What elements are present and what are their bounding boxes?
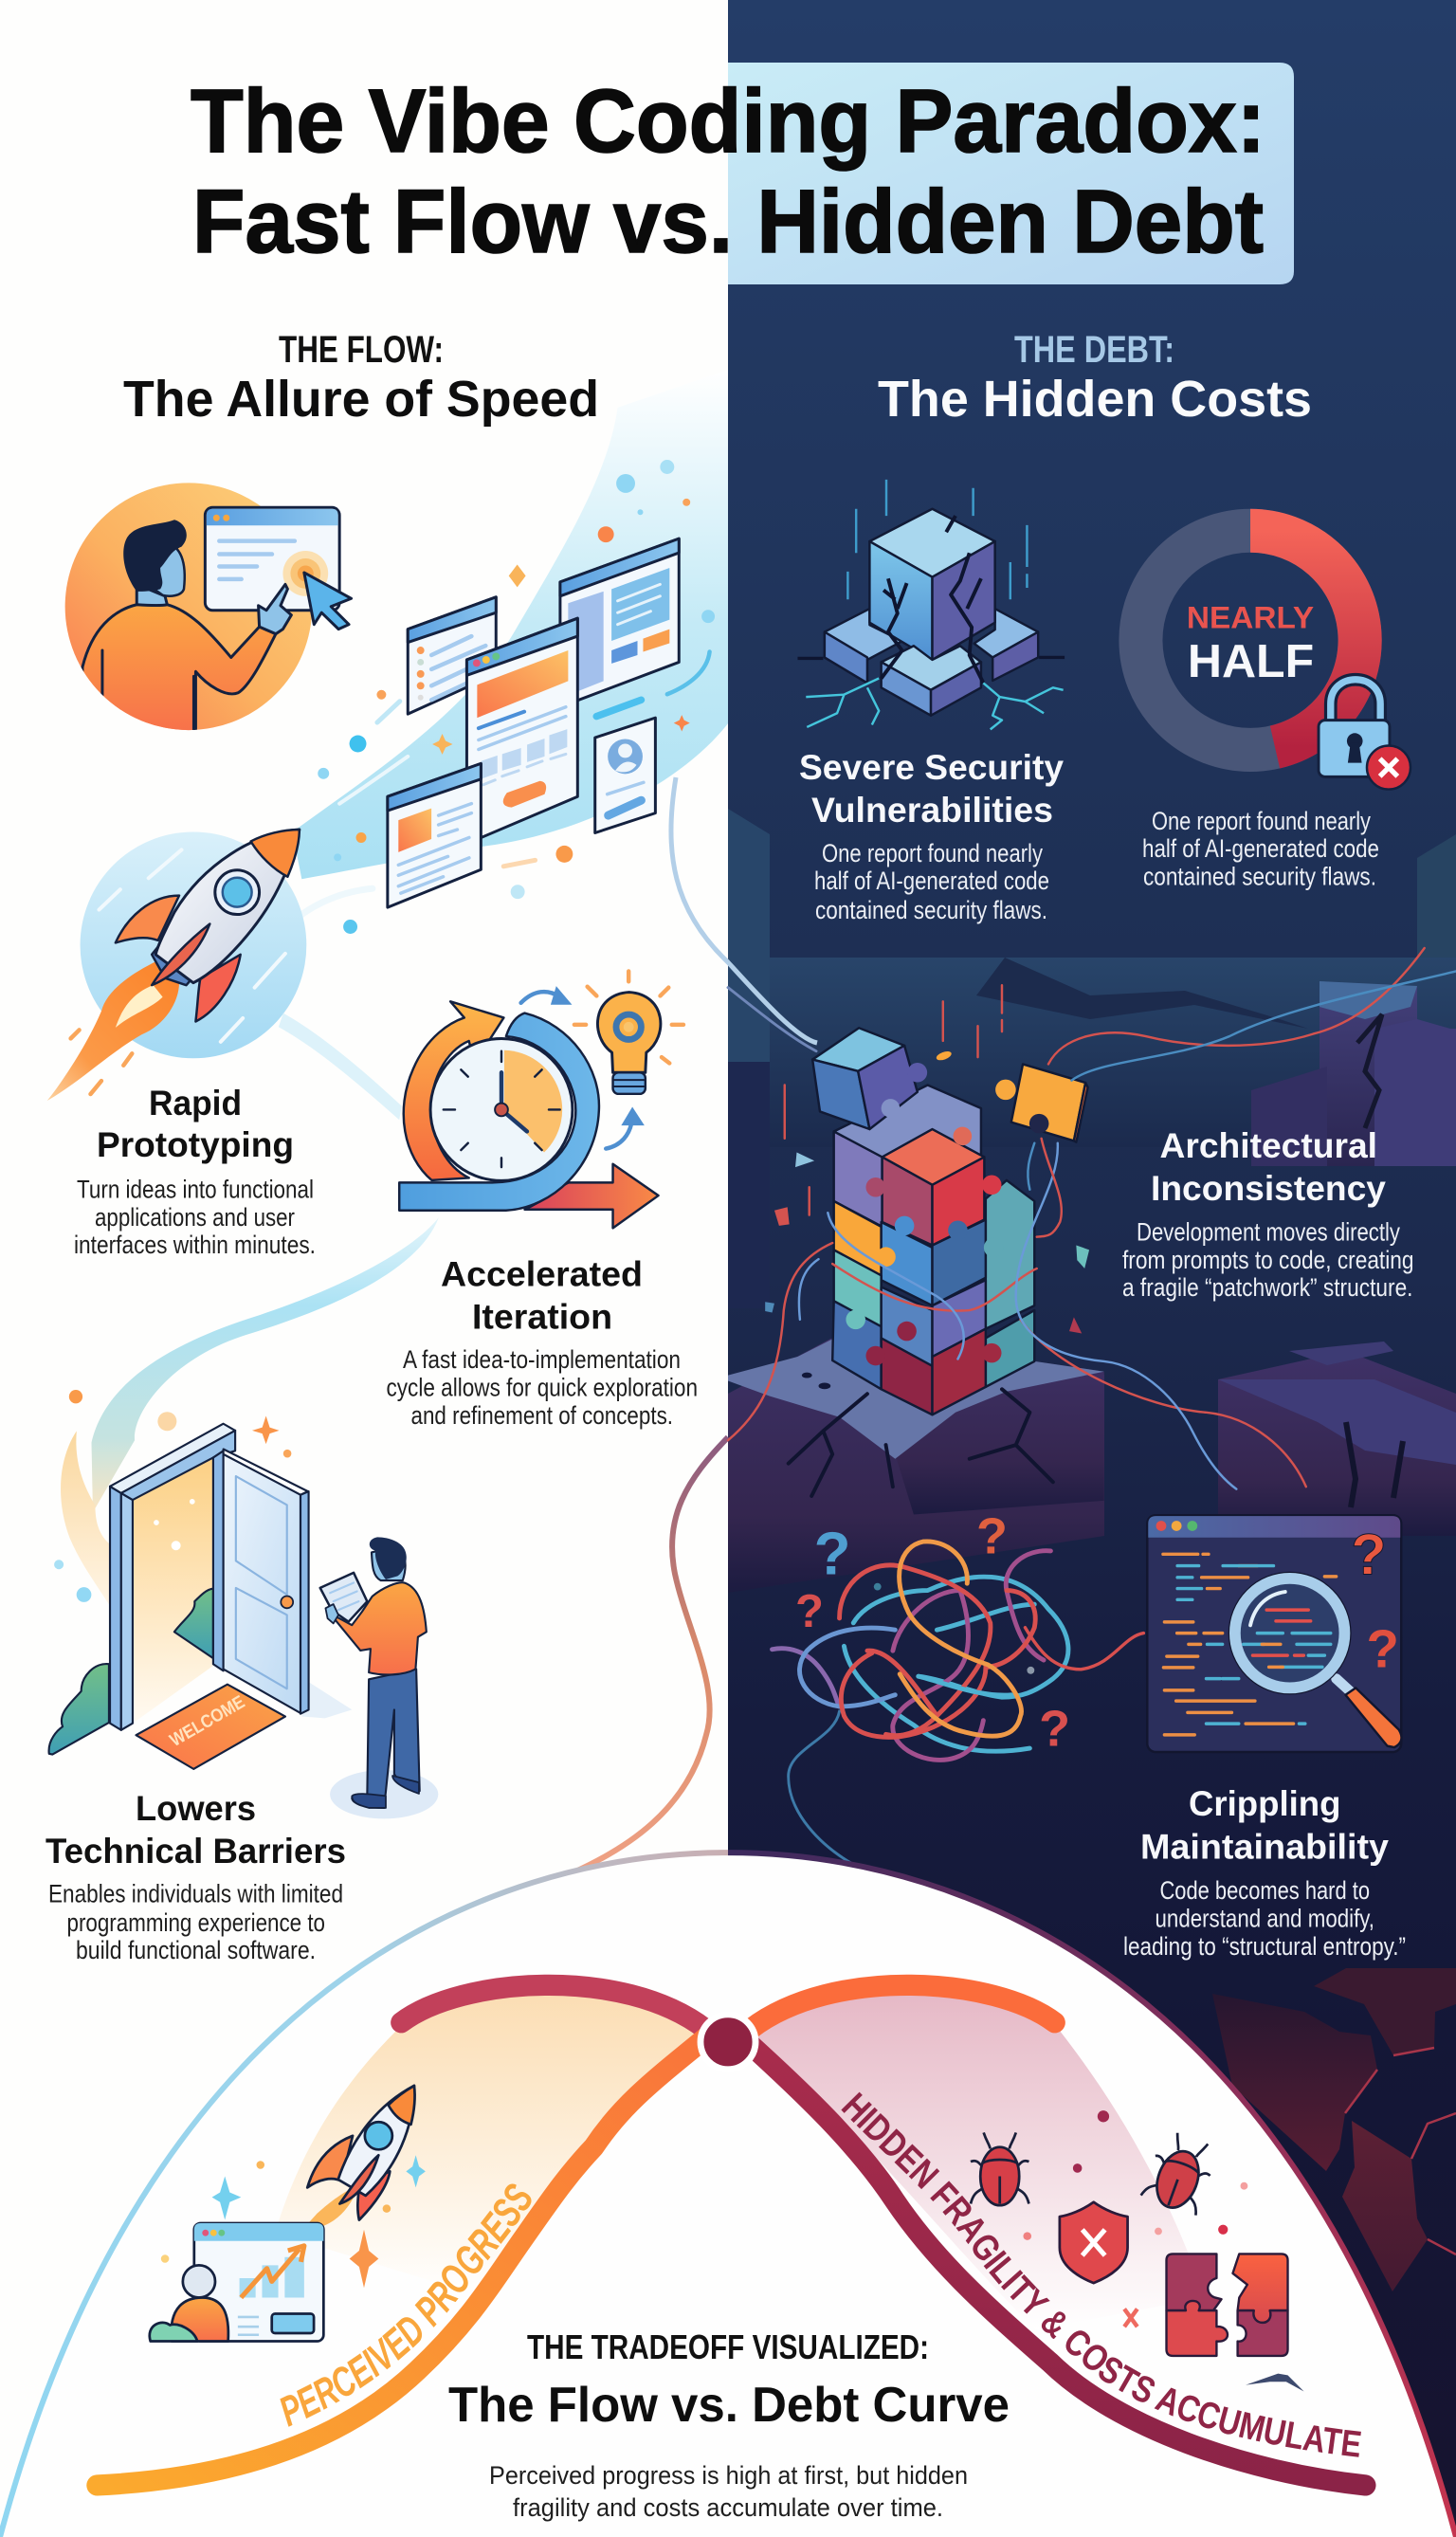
heading: the flow: The Allure of Speed bbox=[123, 371, 599, 428]
icon: clock with cycle arrows bbox=[399, 986, 659, 1228]
question marks around knot: ? bbox=[976, 1507, 1008, 1564]
text: rapid prototyping: Turn ideas into functional bbox=[77, 1176, 314, 1204]
orange swirl behind door bbox=[61, 1431, 114, 1612]
label: hidden fragility: HIDDEN FRAGILITY & COSTS ACCUMULATE bbox=[842, 2091, 1361, 2457]
title: The Vibe Coding Paradox: bbox=[191, 71, 1265, 172]
heading: the debt: THE DEBT: bbox=[1014, 329, 1174, 371]
icon: browser windows bbox=[388, 538, 679, 907]
question marks around knot: ? bbox=[814, 1520, 851, 1587]
icon: open door with welcome mat and person bbox=[49, 1390, 438, 1818]
text: severe security vulnerabilities bbox=[799, 748, 1064, 924]
icon: code window with magnifier bbox=[1147, 1515, 1402, 1752]
label: perceived progress: PERCEIVED PROGRESS bbox=[280, 2184, 531, 2427]
text: severe security vulnerabilities: Vulnerabilities bbox=[811, 791, 1053, 830]
text: severe security vulnerabilities: One report found nearly bbox=[822, 839, 1043, 867]
pale ribbon from rocket bbox=[279, 1013, 402, 1120]
icon: code window with magnifier: ? bbox=[1366, 1618, 1399, 1678]
text: rapid prototyping: interfaces within minutes. bbox=[74, 1231, 316, 1259]
text: crippling maintainability: Code becomes hard to bbox=[1160, 1876, 1370, 1905]
dome background bbox=[0, 1853, 1456, 2537]
title bbox=[191, 71, 1265, 272]
text: lowers technical barriers: build functional software. bbox=[76, 1936, 316, 1964]
question marks around knot: ? bbox=[1039, 1701, 1070, 1758]
text: lowers technical barriers bbox=[46, 1789, 346, 1964]
crossover point bbox=[701, 2015, 755, 2070]
decorative sparkles and dots bbox=[301, 460, 715, 934]
text: accelerated iteration: Accelerated bbox=[441, 1255, 643, 1293]
text: accelerated iteration: A fast idea-to-implementation bbox=[403, 1345, 681, 1374]
text: severe security vulnerabilities: Severe Security bbox=[799, 748, 1064, 787]
text: donut caption: half of AI-generated code bbox=[1142, 834, 1379, 863]
donut chart: nearly half bbox=[1140, 531, 1360, 750]
text: tradeoff caption: Perceived progress is high at first, but hidden bbox=[489, 2461, 968, 2490]
hidden cost curve bbox=[747, 2042, 1365, 2485]
thin flow lines crossing the divider bbox=[573, 777, 817, 1872]
question marks around knot bbox=[795, 1507, 1070, 1758]
text: tradeoff caption: fragility and costs accumulate over time. bbox=[513, 2493, 943, 2522]
text: architectural inconsistency: Inconsistency bbox=[1151, 1169, 1386, 1208]
flow swoosh bbox=[292, 370, 728, 879]
tangled wires bbox=[728, 948, 1456, 1489]
shaded debt area bbox=[757, 1981, 1205, 2330]
icon: lightbulb with gear bbox=[574, 971, 683, 1094]
donut chart: nearly half: NEARLY bbox=[1187, 601, 1315, 635]
text: rapid prototyping: Prototyping bbox=[97, 1125, 294, 1164]
heading: the flow: THE FLOW: bbox=[279, 329, 444, 371]
text: accelerated iteration: and refinement of concepts. bbox=[411, 1401, 673, 1430]
background: light flow half bbox=[0, 0, 728, 2537]
text: crippling maintainability bbox=[1123, 1784, 1406, 1961]
text: donut caption bbox=[1142, 807, 1379, 891]
icon: rocket bbox=[47, 830, 306, 1101]
title: Fast Flow vs. Hidden Debt bbox=[192, 172, 1264, 272]
text: tradeoff caption: THE TRADEOFF VISUALIZED: bbox=[527, 2327, 929, 2366]
background scenery: cracked walls and rocks bbox=[728, 809, 1456, 2291]
icon: broken shield bbox=[1060, 2202, 1128, 2283]
heading: the debt: The Hidden Costs bbox=[878, 371, 1312, 428]
icon: person clicking a browser window bbox=[65, 483, 352, 738]
text: accelerated iteration bbox=[387, 1255, 698, 1430]
text: lowers technical barriers: Technical Barriers bbox=[46, 1832, 346, 1871]
icon: small rocket bbox=[302, 2086, 415, 2230]
debris fragments bbox=[765, 1049, 1089, 1389]
text: crippling maintainability: understand and modify, bbox=[1155, 1905, 1374, 1933]
donut chart: nearly half: HALF bbox=[1188, 636, 1314, 687]
icon: broken puzzle bbox=[1167, 2254, 1288, 2356]
question marks around knot: ? bbox=[795, 1586, 824, 1637]
perceived progress curve bbox=[97, 2035, 709, 2485]
icon: open door with welcome mat and person: WELCOME bbox=[167, 1692, 248, 1751]
text: donut caption: One report found nearly bbox=[1152, 807, 1371, 835]
debt arc bbox=[751, 1985, 1055, 2029]
text: donut caption: contained security flaws. bbox=[1143, 863, 1376, 891]
icon: bug one bbox=[971, 2132, 1028, 2205]
title backing box bbox=[728, 63, 1294, 284]
text: severe security vulnerabilities: half of AI-generated code bbox=[814, 867, 1049, 895]
flow ribbon down to door bbox=[91, 1217, 439, 1512]
icon: padlock with x bbox=[1319, 680, 1410, 790]
text: architectural inconsistency: Development moves directly bbox=[1137, 1218, 1400, 1247]
heading: the debt bbox=[878, 329, 1312, 428]
text: architectural inconsistency: Architectural bbox=[1160, 1126, 1377, 1165]
debt particles bbox=[1023, 2110, 1304, 2391]
text: accelerated iteration: cycle allows for quick exploration bbox=[387, 1374, 698, 1402]
text: lowers technical barriers: Enables individuals with limited bbox=[48, 1879, 343, 1907]
text: rapid prototyping: applications and user bbox=[95, 1203, 295, 1232]
icon: dashboard with person bbox=[150, 2223, 323, 2342]
flow sparkles bbox=[161, 2155, 426, 2288]
text: crippling maintainability: leading to “structural entropy.” bbox=[1123, 1932, 1406, 1961]
flowing light ribbons and clock illustration bbox=[61, 971, 683, 1612]
text: lowers technical barriers: programming experience to bbox=[66, 1908, 325, 1937]
text: crippling maintainability: Maintainability bbox=[1140, 1828, 1389, 1866]
flow arc bbox=[401, 1985, 705, 2029]
tradeoff panel: curve dome bbox=[0, 1850, 1456, 2537]
text: tradeoff caption: The Flow vs. Debt Curve bbox=[448, 2378, 1010, 2433]
illustration cluster: flow swoosh, person, windows, rocket bbox=[47, 370, 728, 1101]
dome outline bbox=[0, 1853, 1456, 2537]
text: severe security vulnerabilities: contained security flaws. bbox=[815, 896, 1047, 924]
text: crippling maintainability: Crippling bbox=[1189, 1784, 1340, 1823]
text: tradeoff caption bbox=[448, 2327, 1010, 2522]
text: lowers technical barriers: Lowers bbox=[136, 1789, 256, 1828]
icon: tangled code knot bbox=[773, 1542, 1143, 1865]
icon: code window with magnifier: ? bbox=[1351, 1522, 1387, 1586]
shaded flow area bbox=[275, 1981, 699, 2297]
text: rapid prototyping: Rapid bbox=[149, 1084, 242, 1122]
background: dark debt half bbox=[728, 0, 1456, 2537]
maintainability illustrations bbox=[773, 1507, 1402, 1865]
text: architectural inconsistency bbox=[1122, 1126, 1414, 1302]
text: rapid prototyping bbox=[74, 1084, 316, 1259]
text: accelerated iteration: Iteration bbox=[472, 1297, 612, 1337]
icon: bug two bbox=[1140, 2128, 1220, 2217]
icon: cracked cube stack bbox=[797, 480, 1065, 729]
security illustrations bbox=[797, 480, 1410, 790]
heading: the flow bbox=[123, 329, 599, 428]
icon: patchwork puzzle tower with wires bbox=[728, 948, 1456, 1515]
